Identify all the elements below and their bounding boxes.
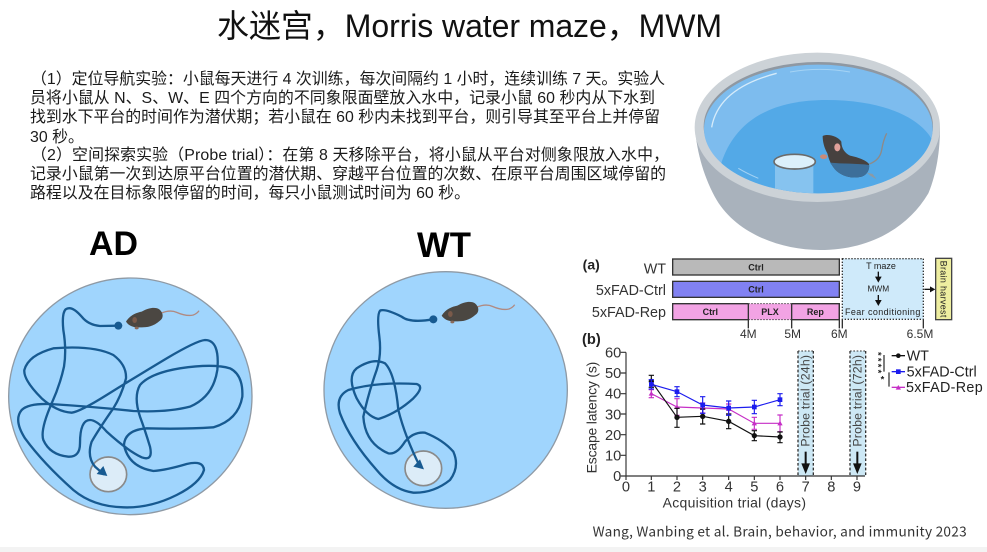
series: WT	[649, 375, 783, 443]
maze: AD	[9, 278, 252, 515]
group labels: WT	[644, 261, 666, 277]
text block: experiment description: （2）空间探索实验（Probe trial）：在第 8 天移除平台，将小鼠从平台对侧象限放入水中，	[31, 146, 669, 164]
x axis ticks: 5	[750, 480, 758, 496]
y axis ticks: 10	[605, 449, 621, 465]
text block: experiment description: 员将小鼠从 N、S、W、E 四个方向的不同象限面壁放入水中，记录小鼠 60 秒内从下水到	[30, 88, 655, 107]
bar: 5xFAD-Rep: PLX	[761, 307, 779, 317]
x axis ticks: 8	[827, 480, 835, 496]
month axis labels: 6M	[831, 327, 848, 341]
y axis ticks: 50	[605, 366, 621, 382]
box: behaviour tests: Fear conditioning	[845, 307, 920, 317]
month axis labels: 4M	[740, 327, 757, 341]
box: behaviour tests: T maze	[866, 261, 896, 271]
bar: WT: Ctrl	[748, 262, 764, 272]
box: behaviour tests	[842, 259, 923, 319]
significance markers: ****	[873, 352, 883, 374]
text block: experiment description	[30, 70, 669, 202]
x axis ticks: 0	[622, 480, 630, 496]
bar: 5xFAD-Ctrl	[673, 281, 839, 297]
legend: 5xFAD-Ctrl	[907, 365, 977, 381]
month axis labels: 5M	[784, 327, 801, 341]
x axis ticks: 6	[776, 480, 784, 496]
mouse swimming	[820, 133, 887, 179]
text block: experiment description: 记录小鼠第一次到达原平台位置的潜伏期、穿越平台位置的次数、在原平台周围区域停留的	[30, 165, 666, 183]
x axis ticks: 1	[647, 480, 655, 496]
panel a: timeline diagram	[582, 256, 952, 348]
panel label b: (b)	[582, 332, 601, 348]
probe trial 24h band: Probe trial (24h)	[798, 355, 812, 447]
arrow to brain harvest	[924, 286, 935, 292]
box: brain harvest	[936, 258, 952, 320]
group labels: 5xFAD-Ctrl	[596, 283, 666, 299]
x axis ticks: 4	[725, 480, 733, 496]
platform	[774, 154, 815, 169]
month axis labels: 6.5M	[907, 327, 933, 341]
x axis ticks: 2	[673, 480, 681, 496]
platform	[90, 457, 127, 492]
text block: experiment description: （1）定位导航实验：小鼠每天进行 4 次训练，每次间隔约 1 小时，连续训练 7 天。实验人	[31, 70, 665, 88]
y axis ticks: 0	[613, 469, 621, 485]
significance markers: *	[881, 375, 885, 385]
y axis title: Escape latency (s)	[583, 362, 599, 473]
text block: experiment description: 找到水下平台的时间作为潜伏期；若小鼠在 60 秒内未找到平台，则引导其至平台上并停留	[30, 108, 660, 126]
group labels	[592, 261, 666, 321]
text block: experiment description: 路程以及在目标象限停留的时间，每只小鼠测试时间为 60 秒。	[30, 184, 470, 202]
panel b: escape latency chart	[583, 346, 983, 541]
legend: 5xFAD-Rep	[906, 380, 983, 396]
heading: AD: AD	[89, 225, 138, 263]
panel label a: (a)	[583, 256, 600, 272]
x axis ticks	[622, 480, 861, 496]
title: 水迷宫，Morris water maze，MWM	[217, 8, 722, 44]
x axis ticks: 7	[802, 480, 810, 496]
pool illustration	[695, 53, 940, 250]
bar: 5xFAD-Rep: Ctrl	[703, 307, 718, 317]
x axis ticks: 9	[853, 480, 861, 496]
y axis ticks: 30	[605, 407, 621, 423]
x axis title: Acquisition trial (days)	[663, 494, 806, 510]
bar: 5xFAD-Rep: Rep	[807, 307, 824, 317]
group labels: 5xFAD-Rep	[592, 305, 666, 321]
y axis ticks: 60	[605, 346, 621, 362]
probe trial 72h band: Probe trial (72h)	[850, 355, 864, 447]
bar: WT	[673, 259, 839, 275]
y axis ticks: 40	[605, 387, 621, 403]
probe trial 24h band	[798, 351, 813, 476]
swim path	[18, 308, 242, 507]
series: 5xFAD-Rep	[649, 390, 783, 432]
mouse	[126, 308, 199, 329]
mouse	[442, 302, 515, 323]
significance markers	[873, 352, 889, 387]
bar: 5xFAD-Rep	[673, 304, 923, 328]
swim path	[339, 310, 456, 493]
citation: Wang, Wanbing et al. Brain, behavior, and immunity 2023	[593, 521, 967, 541]
month axis labels	[740, 327, 933, 341]
text block: experiment description: 30 秒。	[30, 128, 84, 146]
probe trial 72h band	[850, 351, 866, 476]
legend	[892, 349, 983, 396]
bar: 5xFAD-Ctrl: Ctrl	[748, 285, 764, 295]
series: 5xFAD-Ctrl	[649, 380, 783, 415]
box: brain harvest: Brain harvest	[938, 261, 948, 318]
axes	[621, 352, 865, 480]
box: behaviour tests: MWM	[867, 283, 889, 293]
x axis ticks: 3	[699, 480, 707, 496]
maze: WT	[324, 272, 567, 508]
platform	[405, 451, 442, 486]
heading: WT: WT	[417, 226, 471, 265]
y axis ticks	[605, 346, 621, 485]
legend: WT	[907, 349, 929, 365]
y axis ticks: 20	[605, 428, 621, 444]
